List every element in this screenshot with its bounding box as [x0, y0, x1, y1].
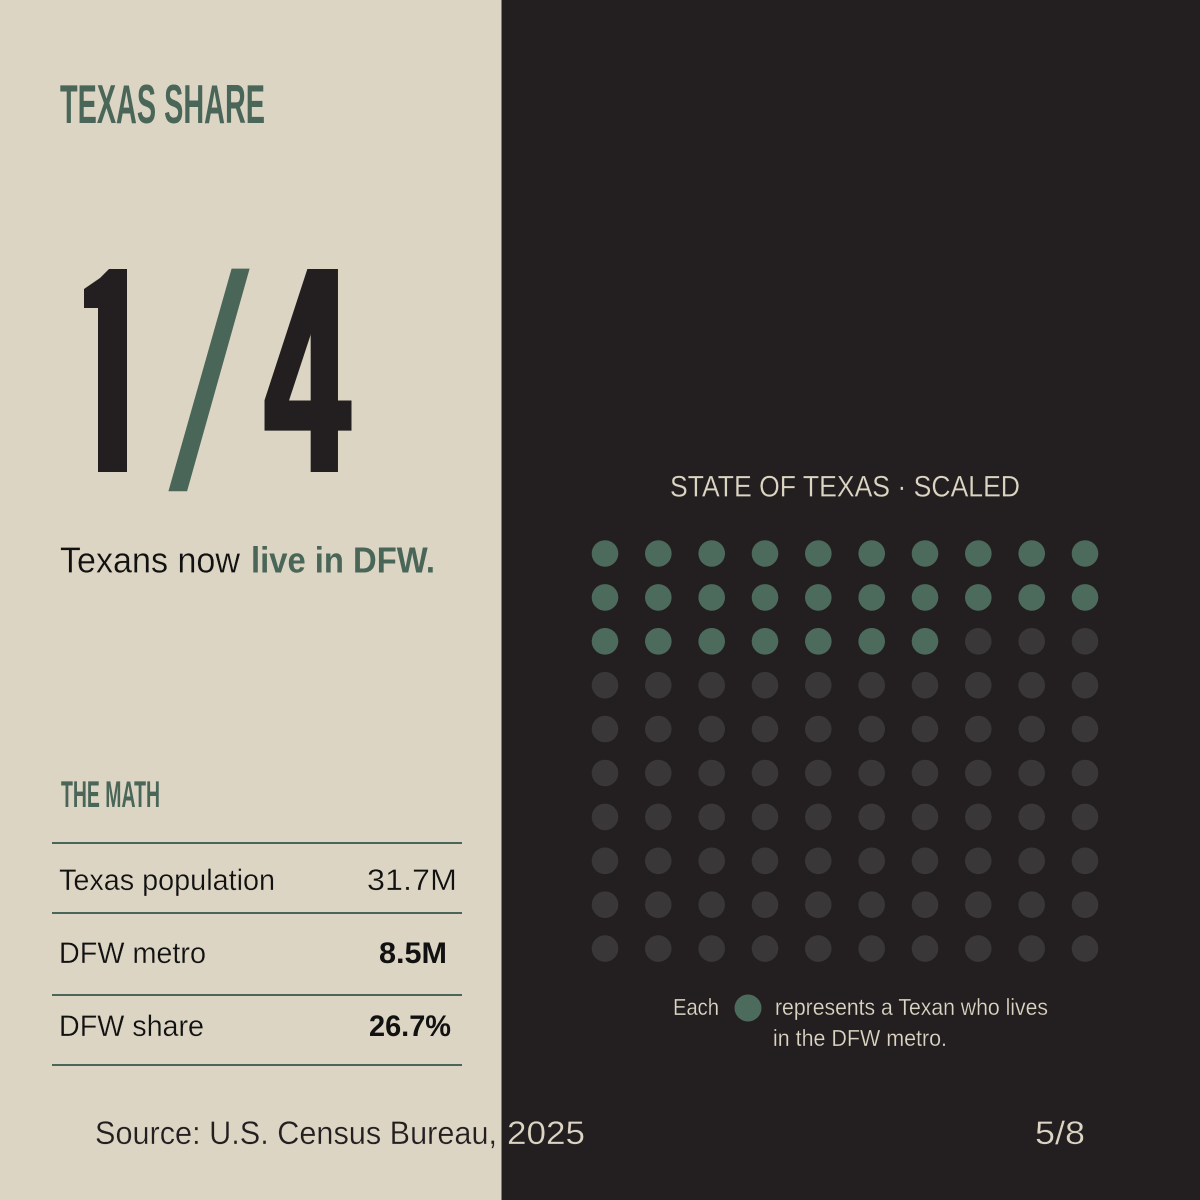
big fraction [84, 268, 352, 492]
subtitle: Texans now [60, 540, 241, 580]
row: DFW share [59, 1010, 451, 1043]
big fraction: 1 [77, 216, 141, 533]
subtitle: live in DFW. [251, 540, 435, 580]
source line: Source: U.S. Census Bureau, [95, 1115, 497, 1151]
row: DFW metro: 8.5M [379, 937, 447, 970]
panel: left summary [0, 0, 502, 1200]
title: TEXAS SHARE [60, 73, 265, 135]
legend: in the DFW metro. [773, 1025, 947, 1051]
row: Texas population: Texas population [59, 864, 275, 897]
row: DFW metro: DFW metro [59, 937, 206, 970]
row: Texas population [59, 864, 457, 897]
chart heading: STATE OF TEXAS · SCALED [670, 470, 1020, 504]
legend [673, 994, 1048, 1051]
table: the math [52, 842, 462, 1066]
row: Texas population: 31.7M [367, 864, 457, 897]
heading: the math: THE MATH [61, 774, 160, 815]
dot grid chart [592, 540, 1098, 962]
legend: represents a Texan who lives [775, 994, 1048, 1020]
row: DFW metro [59, 937, 447, 970]
panel: dot matrix [502, 0, 1200, 1200]
row: DFW share: DFW share [59, 1010, 204, 1043]
legend: Each [673, 994, 719, 1020]
big fraction: / [164, 210, 255, 558]
icon: legend dot [734, 994, 762, 1022]
source line: 2025 [507, 1115, 585, 1151]
row: DFW share: 26.7% [369, 1010, 451, 1043]
page number: 5/8 [1035, 1115, 1085, 1151]
big fraction: 4 [266, 205, 349, 535]
